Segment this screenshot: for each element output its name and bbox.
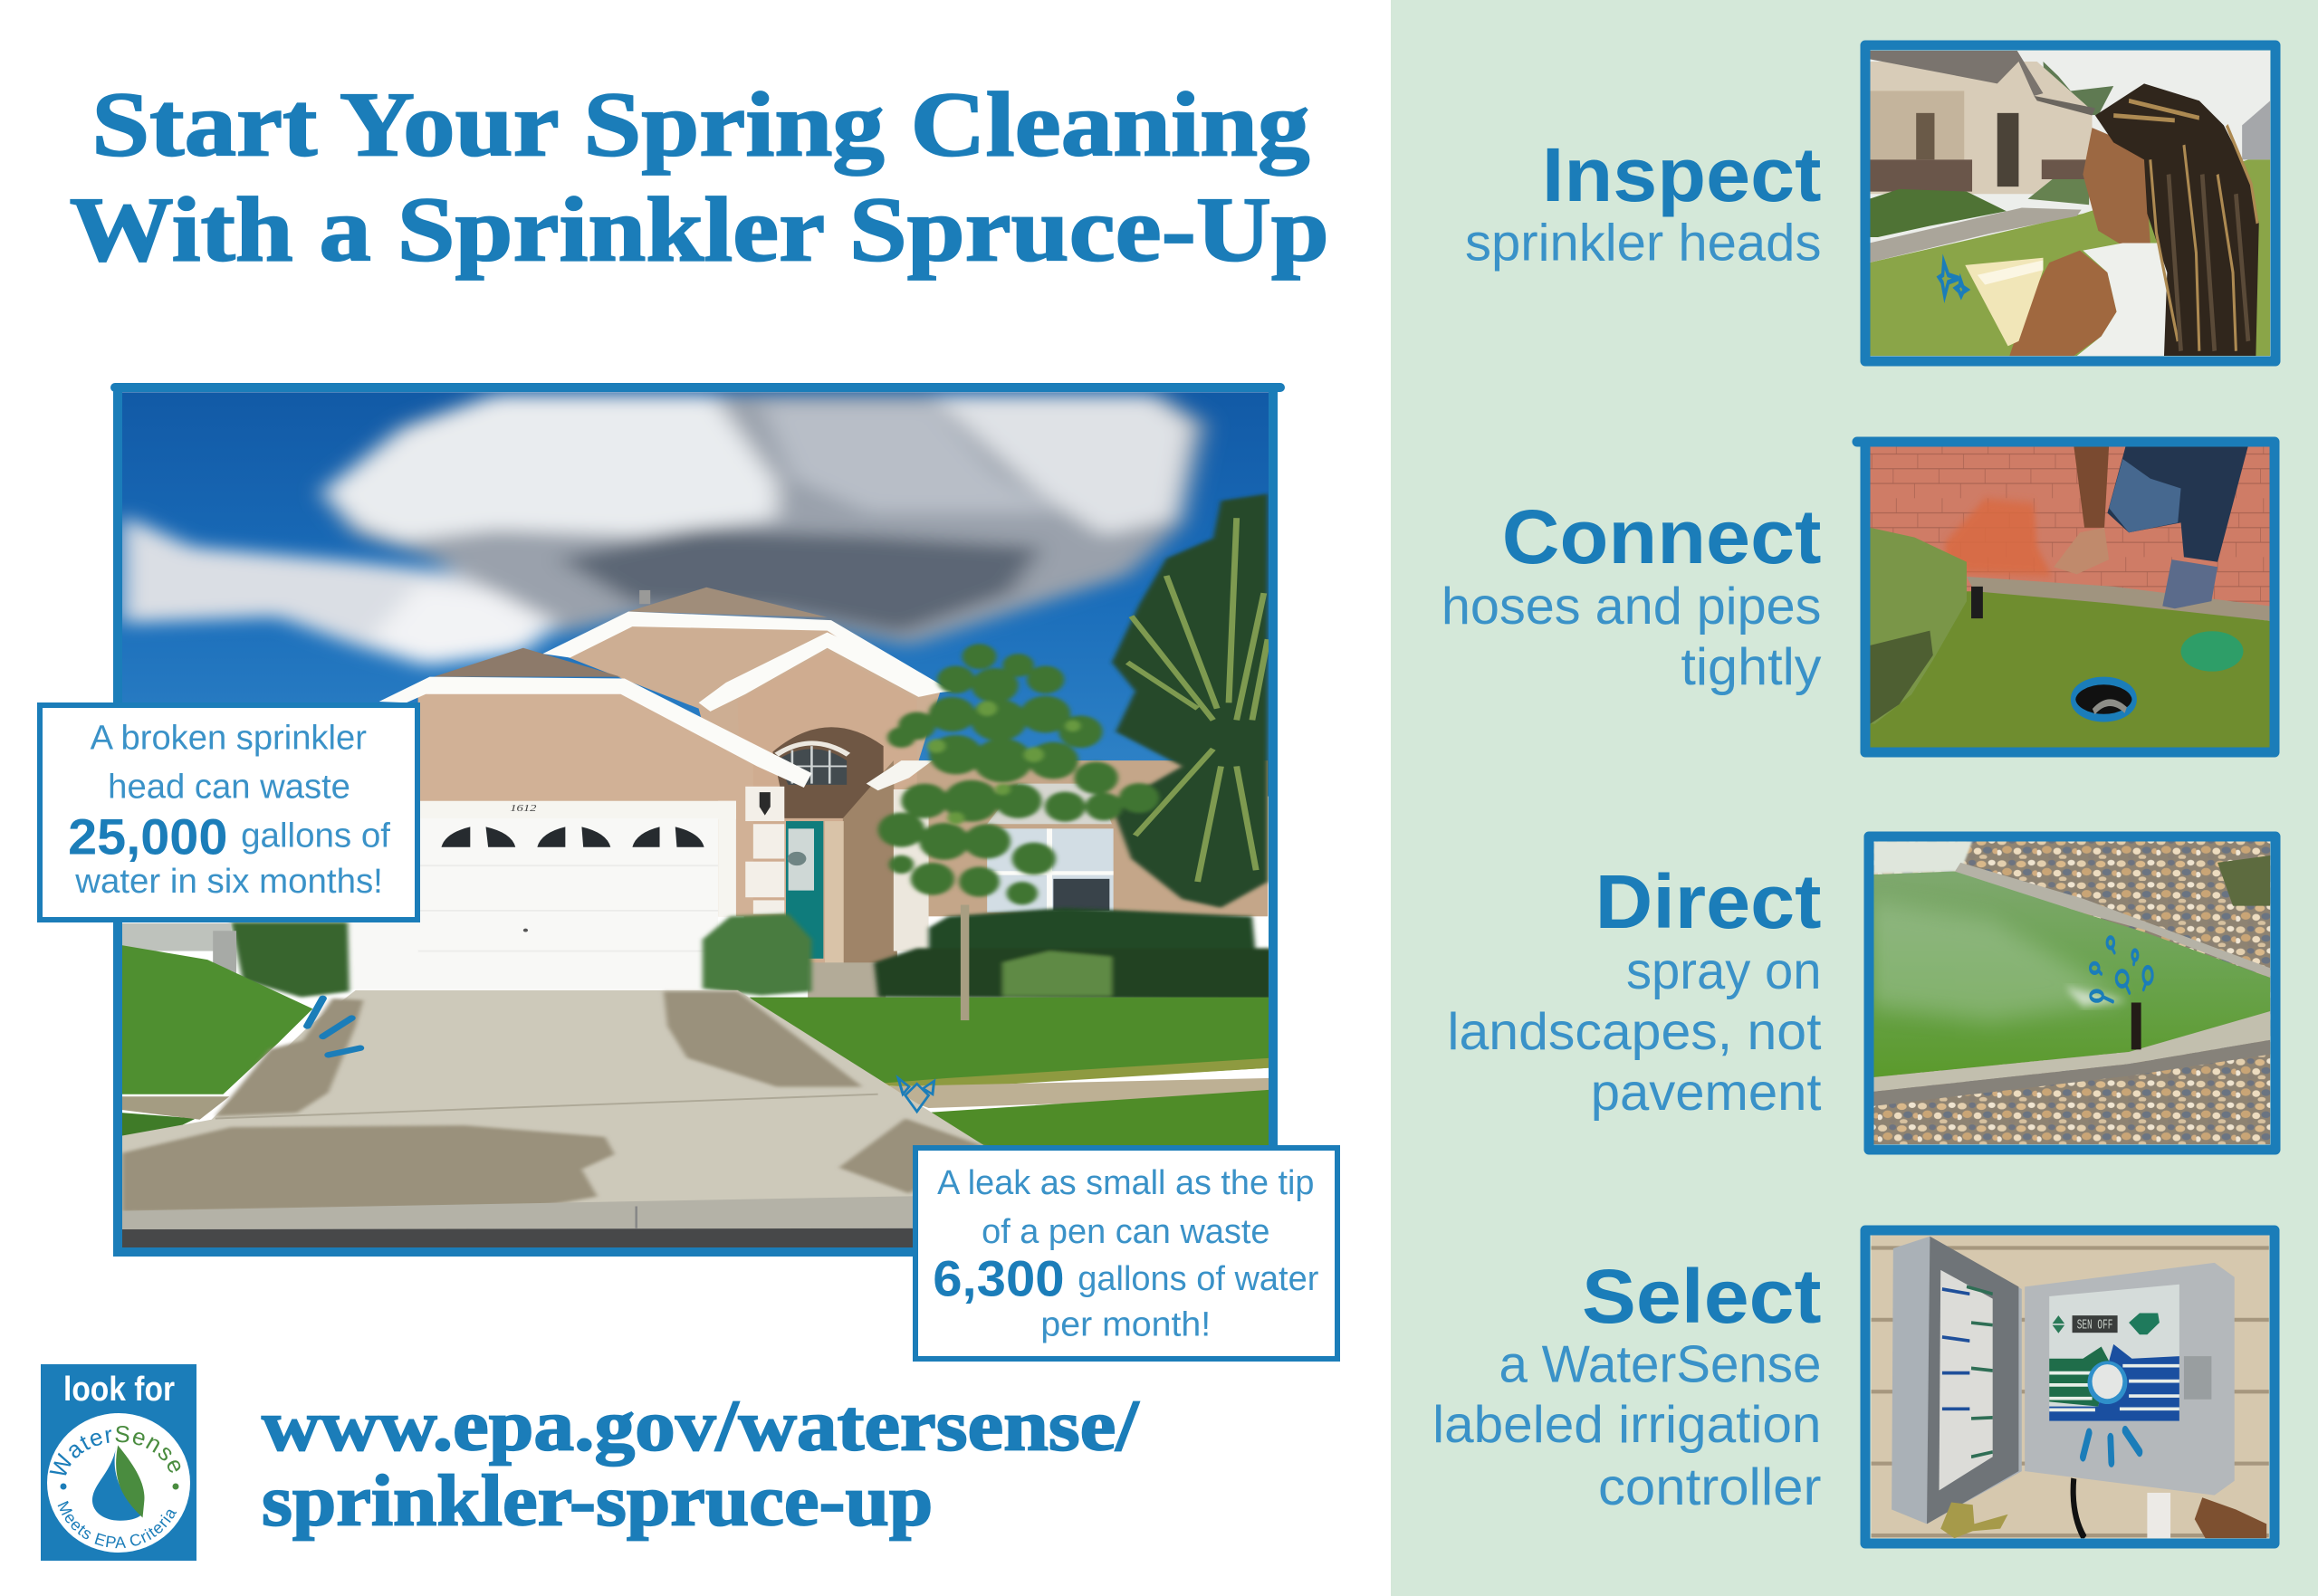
step: direct — [1447, 836, 2275, 1150]
select frame — [1865, 1230, 2275, 1543]
wet patches — [121, 991, 987, 1212]
website URL: www.epa.gov/watersense/ — [262, 1386, 1140, 1466]
title: Start Your Spring Cleaning — [91, 73, 1310, 175]
left lawn — [121, 945, 312, 1094]
callout: pen tip leak — [915, 1148, 1337, 1359]
callout: broken sprinkler head: water in six months! — [74, 862, 383, 900]
sidewalk — [870, 1078, 1272, 1108]
lower right lawn — [924, 1090, 1272, 1147]
clouds — [121, 394, 1205, 665]
panel: right green background — [1391, 0, 2318, 1596]
direct text: pavement — [1591, 1064, 1822, 1122]
callout: broken sprinkler head: A broken sprinkler — [91, 719, 367, 757]
direct photo — [1869, 836, 2275, 1150]
logo seal: Meets EPA Criteria — [58, 1501, 177, 1548]
driveway — [121, 990, 987, 1214]
second gable — [744, 766, 916, 963]
upper gable — [566, 622, 940, 766]
logo seal — [47, 1413, 190, 1553]
select text: labeled irrigation — [1432, 1396, 1821, 1454]
callout: pen tip leak: of a pen can waste — [982, 1212, 1269, 1250]
small tree — [878, 644, 1159, 1020]
website URL — [262, 1386, 1140, 1542]
inspect frame — [1865, 45, 2275, 361]
logo caption: look for — [63, 1371, 175, 1409]
direct text: spray on — [1626, 942, 1821, 1000]
house number: 1612 — [510, 803, 537, 814]
direct text: landscapes, not — [1447, 1003, 1822, 1061]
callout: pen tip leak: 6,300 — [933, 1251, 1065, 1307]
curb and road — [122, 1196, 913, 1229]
connect text — [1442, 493, 1822, 696]
frame — [115, 387, 1280, 1252]
step: inspect — [1465, 45, 2275, 361]
garage windows — [441, 827, 704, 847]
inspect text: Inspect — [1542, 131, 1821, 217]
select photo — [1865, 1230, 2275, 1543]
right lawn — [750, 998, 1272, 1086]
step: connect — [1442, 442, 2275, 752]
callout: broken sprinkler head: head can waste — [108, 767, 350, 805]
garage gable wall — [418, 690, 753, 916]
callout: pen tip leak: per month! — [1040, 1305, 1211, 1343]
website URL: sprinkler-spruce-up — [262, 1462, 933, 1542]
callout: pen tip leak: A leak as small as the tip — [937, 1163, 1314, 1201]
title: With a Sprinkler Spruce-Up — [70, 178, 1329, 280]
select text: controller — [1598, 1458, 1821, 1516]
callout: broken sprinkler head — [40, 705, 417, 920]
house wall far right — [916, 760, 1268, 916]
select text: a WaterSense — [1499, 1335, 1821, 1393]
connect frame — [1857, 442, 2275, 752]
icon: spray dashes — [307, 999, 360, 1055]
select text: Select — [1582, 1253, 1821, 1339]
direct frame — [1869, 836, 2275, 1150]
garage door — [418, 801, 736, 819]
teal door — [786, 821, 823, 959]
select text — [1432, 1253, 1821, 1516]
WaterSense logo — [41, 1364, 196, 1561]
house right window — [987, 828, 1114, 913]
inspect text — [1465, 131, 1821, 272]
shrubs — [231, 908, 1272, 1000]
callout: pen tip leak: gallons of water — [1078, 1259, 1318, 1297]
title — [70, 73, 1329, 280]
palm tree — [1112, 493, 1268, 908]
direct text: Direct — [1595, 858, 1821, 944]
inspect text: sprinkler heads — [1465, 214, 1821, 272]
connect text: tightly — [1681, 638, 1822, 696]
callout: broken sprinkler head: 25,000 — [68, 809, 227, 865]
connect photo — [1857, 442, 2275, 752]
entry trim — [745, 787, 784, 914]
inspect photo — [1865, 45, 2275, 361]
main photo: house with wet driveway — [115, 387, 1280, 1252]
entry step — [808, 962, 886, 999]
direct text — [1447, 858, 1822, 1122]
neighbour wall and utility box — [121, 923, 231, 951]
connect text: Connect — [1502, 493, 1821, 579]
step: select — [1432, 1230, 2275, 1543]
logo seal: WaterSense — [49, 1426, 181, 1476]
arched entry and window — [772, 727, 884, 818]
connect text: hoses and pipes — [1442, 578, 1821, 636]
select photo: SEN OFF — [2077, 1317, 2112, 1333]
icon: leak sparkle — [898, 1078, 934, 1112]
callout: broken sprinkler head: gallons of — [241, 816, 391, 854]
sky — [121, 392, 1272, 797]
